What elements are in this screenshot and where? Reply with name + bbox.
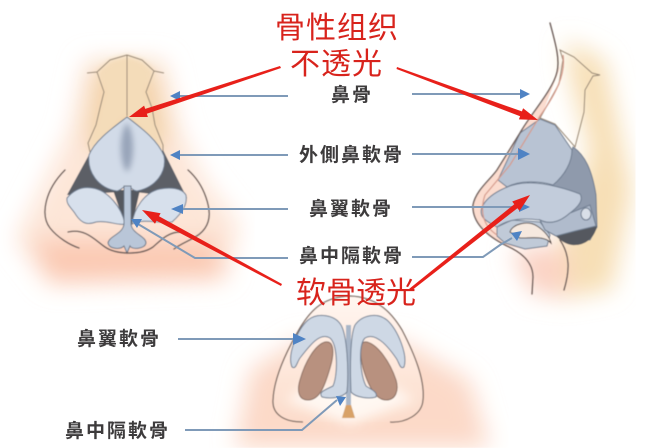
red arrow: to side bone [396,67,538,120]
bottom nose diagram [235,296,490,448]
pink skin layer [473,60,563,250]
bone outline [87,55,164,152]
left alar cartilage [67,188,125,224]
alar cartilage [481,183,596,236]
label: alar cartilage: 鼻翼軟骨 [309,198,393,220]
right alar cartilage [350,315,405,398]
side nose diagram [473,23,632,300]
dark side cartilage [545,147,597,240]
label: septal cartilage bottom: 鼻中隔軟骨 [65,420,170,442]
columella cartilage [108,186,146,253]
red arrow: to side cartilage [409,195,530,291]
label: septal cartilage: 鼻中隔軟骨 [299,245,404,267]
skin shading [510,40,632,300]
front nose diagram [15,55,240,285]
profile outline [473,23,568,294]
upper lateral cartilage [89,117,164,191]
red title: cartilage translucent: 软骨透光 [296,277,416,310]
right alar cartilage [132,188,186,224]
red title: opaque: 不透光 [290,48,383,81]
inner pink line [483,55,563,235]
left nostril [299,342,333,400]
right nostril [360,342,397,400]
dark side triangles [67,150,187,225]
skin contour [273,296,423,422]
left alar cartilage [291,315,348,398]
label: upper lateral cartilage: 外側鼻軟骨 [299,144,404,166]
lower septal cartilage [497,220,550,249]
skin contour lines [45,170,209,253]
red arrow: to front bone [129,66,281,117]
septum [342,325,355,418]
label: nasal bone: 鼻骨 [331,84,373,106]
upper lateral cartilage [498,119,572,187]
blue arrows [131,89,530,430]
nostril base [556,226,597,245]
septum base [342,405,355,418]
label: alar cartilage bottom: 鼻翼軟骨 [77,328,161,350]
red title: bony tissue: 骨性组织 [275,12,399,45]
bone [540,50,600,147]
nostril opening [510,223,551,243]
red arrow: to front cartilage [142,210,282,286]
skin shading [15,60,240,285]
skin shading [235,340,490,448]
